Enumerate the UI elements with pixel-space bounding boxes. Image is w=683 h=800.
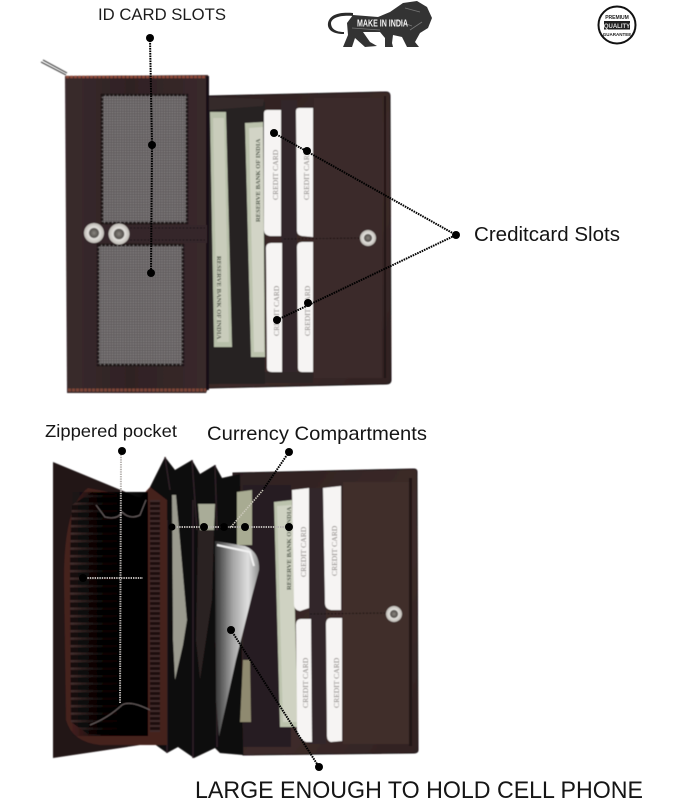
panel: left flap with mesh windows bbox=[65, 75, 209, 393]
label: zippered pocket: Zippered pocket bbox=[45, 421, 177, 441]
callout lines: credit card slots bbox=[270, 129, 460, 324]
credit cards: CREDIT CARD bbox=[301, 657, 310, 708]
credit cards: CREDIT CARD bbox=[272, 285, 281, 336]
credit cards: CREDIT CARD bbox=[332, 657, 341, 708]
credit cards: CREDIT CARD bbox=[330, 525, 339, 576]
credit cards bbox=[264, 108, 313, 372]
phone bbox=[215, 541, 259, 737]
panel: left zipper pocket bbox=[53, 462, 167, 758]
credit cards bbox=[292, 486, 342, 742]
label: currency compartments: Currency Compartments bbox=[207, 423, 427, 445]
label: make in india: MAKE IN INDIA bbox=[357, 18, 408, 30]
bank note bbox=[274, 500, 298, 727]
icon: premium quality badge: QUALITY bbox=[604, 24, 630, 30]
heading: ID card slots: ID CARD SLOTS bbox=[98, 5, 226, 24]
bank note: RESERVE BANK OF INDIA bbox=[286, 507, 293, 590]
credit cards: CREDIT CARD bbox=[299, 526, 308, 577]
icon: premium quality badge bbox=[598, 6, 636, 44]
credit cards: CREDIT CARD bbox=[302, 149, 311, 200]
accordion compartments bbox=[150, 457, 252, 758]
zip pull bbox=[41, 60, 67, 75]
callout lines: zippered pocket bbox=[79, 447, 143, 703]
credit cards: CREDIT CARD bbox=[271, 149, 280, 200]
top wallet: closed card view bbox=[41, 60, 391, 393]
callout line: phone bbox=[227, 626, 323, 771]
panel: right interior bbox=[233, 469, 418, 755]
bank notes bbox=[210, 112, 265, 357]
label: creditcard slots: Creditcard Slots bbox=[474, 224, 620, 246]
icon: premium quality badge: PREMIUM bbox=[605, 15, 629, 21]
icon: flap snaps bbox=[84, 223, 130, 244]
bank notes: RESERVE BANK OF INDIA bbox=[255, 139, 262, 222]
callout lines: ID card slots bbox=[146, 34, 156, 277]
icon: Make in India lion bbox=[328, 1, 432, 47]
icon: premium quality badge: GUARANTEE bbox=[603, 32, 631, 37]
callout lines: currency compartments bbox=[168, 448, 293, 531]
bottom wallet: open view bbox=[53, 457, 418, 758]
icon: right snap bbox=[386, 606, 402, 622]
panel: right interior bbox=[207, 92, 391, 388]
icon: right snap bbox=[360, 230, 376, 246]
credit cards: CREDIT CARD bbox=[303, 285, 312, 336]
bank notes: RESERVE BANK OF INDIA bbox=[215, 256, 222, 339]
